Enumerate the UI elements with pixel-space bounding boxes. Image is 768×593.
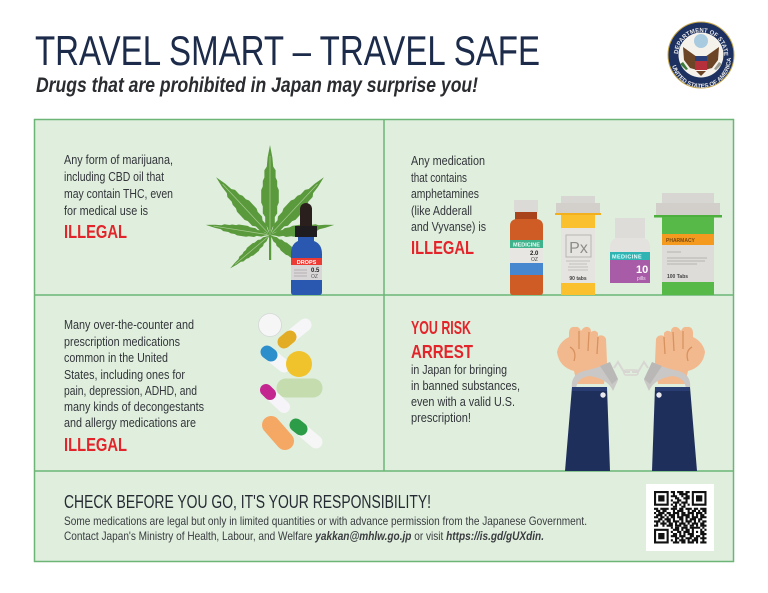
panel: footer text: Some medications are legal but only in limited quantities or with advance permission from the Japanese Government. [64,514,587,528]
panel: arrest text: in Japan for bringing [411,363,507,377]
title: TRAVEL SMART – TRAVEL SAFE [35,27,540,74]
panel: marijuana text: may contain THC, even [64,187,173,201]
panel: over-the-counter text: Many over-the-counter and [64,318,194,332]
icon: purple medicine bottle: pills [637,276,646,282]
icon: handcuffed hands [557,327,705,471]
panel: amphetamines text: Any medication [411,154,485,168]
label: illegal: ILLEGAL [64,435,127,455]
icon: yellow prescription bottle [555,196,601,295]
icon: assorted pills [258,314,316,442]
panel: over-the-counter text [64,318,204,455]
icon: yellow prescription bottle: Px [569,240,588,257]
panel: marijuana text [64,153,173,242]
icon: CBD oil dropper bottle: DROPS [297,260,317,266]
icon: green pharmacy bottle [654,193,722,295]
panel: marijuana text: for medical use is [64,204,148,218]
panel: over-the-counter text: many kinds of decongestants [64,400,204,414]
panel: amphetamines text: (like Adderall [411,204,472,218]
panel: footer text: CHECK BEFORE YOU GO, IT'S YOUR RESPONSIBILITY! [64,492,431,512]
panel: amphetamines text: that contains [411,171,467,185]
subtitle: Drugs that are prohibited in Japan may surprise you! [36,74,478,97]
panel: arrest text: in banned substances, [411,379,520,393]
panel: over-the-counter text: pain, depression, ADHD, and [64,384,197,398]
icon: Department of State seal: DEPARTMENT OF STATE [674,28,728,56]
panel: grid background [34,120,734,562]
icon: Department of State seal: UNITED STATES OF AMERICA [672,58,731,88]
panel: arrest text: ARREST [411,342,473,362]
panel: over-the-counter text: States, including ones for [64,368,185,382]
panel: footer text [64,492,587,543]
icon: brown medicine bottle: OZ [531,257,538,263]
icon: CBD oil dropper bottle: OZ [311,274,318,280]
panel: footer text: Contact Japan's Ministry of Health, Labour, and Welfare yakkan@mhlw.go.jp or visit https://is.gd/gUXdin. [64,529,544,543]
icon: brown medicine bottle: 2.0 [530,251,539,257]
panel: over-the-counter text: and allergy medications are [64,416,196,430]
icon: purple medicine bottle: MEDICINE [612,254,642,260]
panel: arrest text [411,318,520,425]
icon: green pharmacy bottle: 100 Tabs [667,274,688,280]
icon: brown medicine bottle [510,200,543,295]
icon: Department of State seal [668,22,734,88]
panel: amphetamines text [411,154,486,258]
panel: amphetamines text: and Vyvanse) is [411,220,486,234]
panel: over-the-counter text: common in the United [64,351,168,365]
panel: marijuana text: including CBD oil that [64,170,164,184]
icon: yellow prescription bottle: 90 tabs [569,276,587,282]
icon: brown medicine bottle: MEDICINE [513,242,540,248]
icon: CBD oil dropper bottle [291,203,322,295]
panel: arrest text: prescription! [411,411,471,425]
panel: marijuana text: Any form of marijuana, [64,153,173,167]
QR code [646,484,714,551]
icon: CBD oil dropper bottle: 0.5 [311,268,320,274]
icon: cannabis leaf [205,145,335,272]
icon: green pharmacy bottle: PHARMACY [666,238,696,244]
panel: arrest text: YOU RISK [411,318,471,338]
icon: purple medicine bottle: 10 [636,264,648,276]
panel: arrest text: even with a valid U.S. [411,395,515,409]
panel: over-the-counter text: prescription medications [64,335,180,349]
label: illegal: ILLEGAL [64,222,127,242]
icon: purple medicine bottle [610,218,650,283]
label: illegal: ILLEGAL [411,238,474,258]
panel: amphetamines text: amphetamines [411,187,479,201]
